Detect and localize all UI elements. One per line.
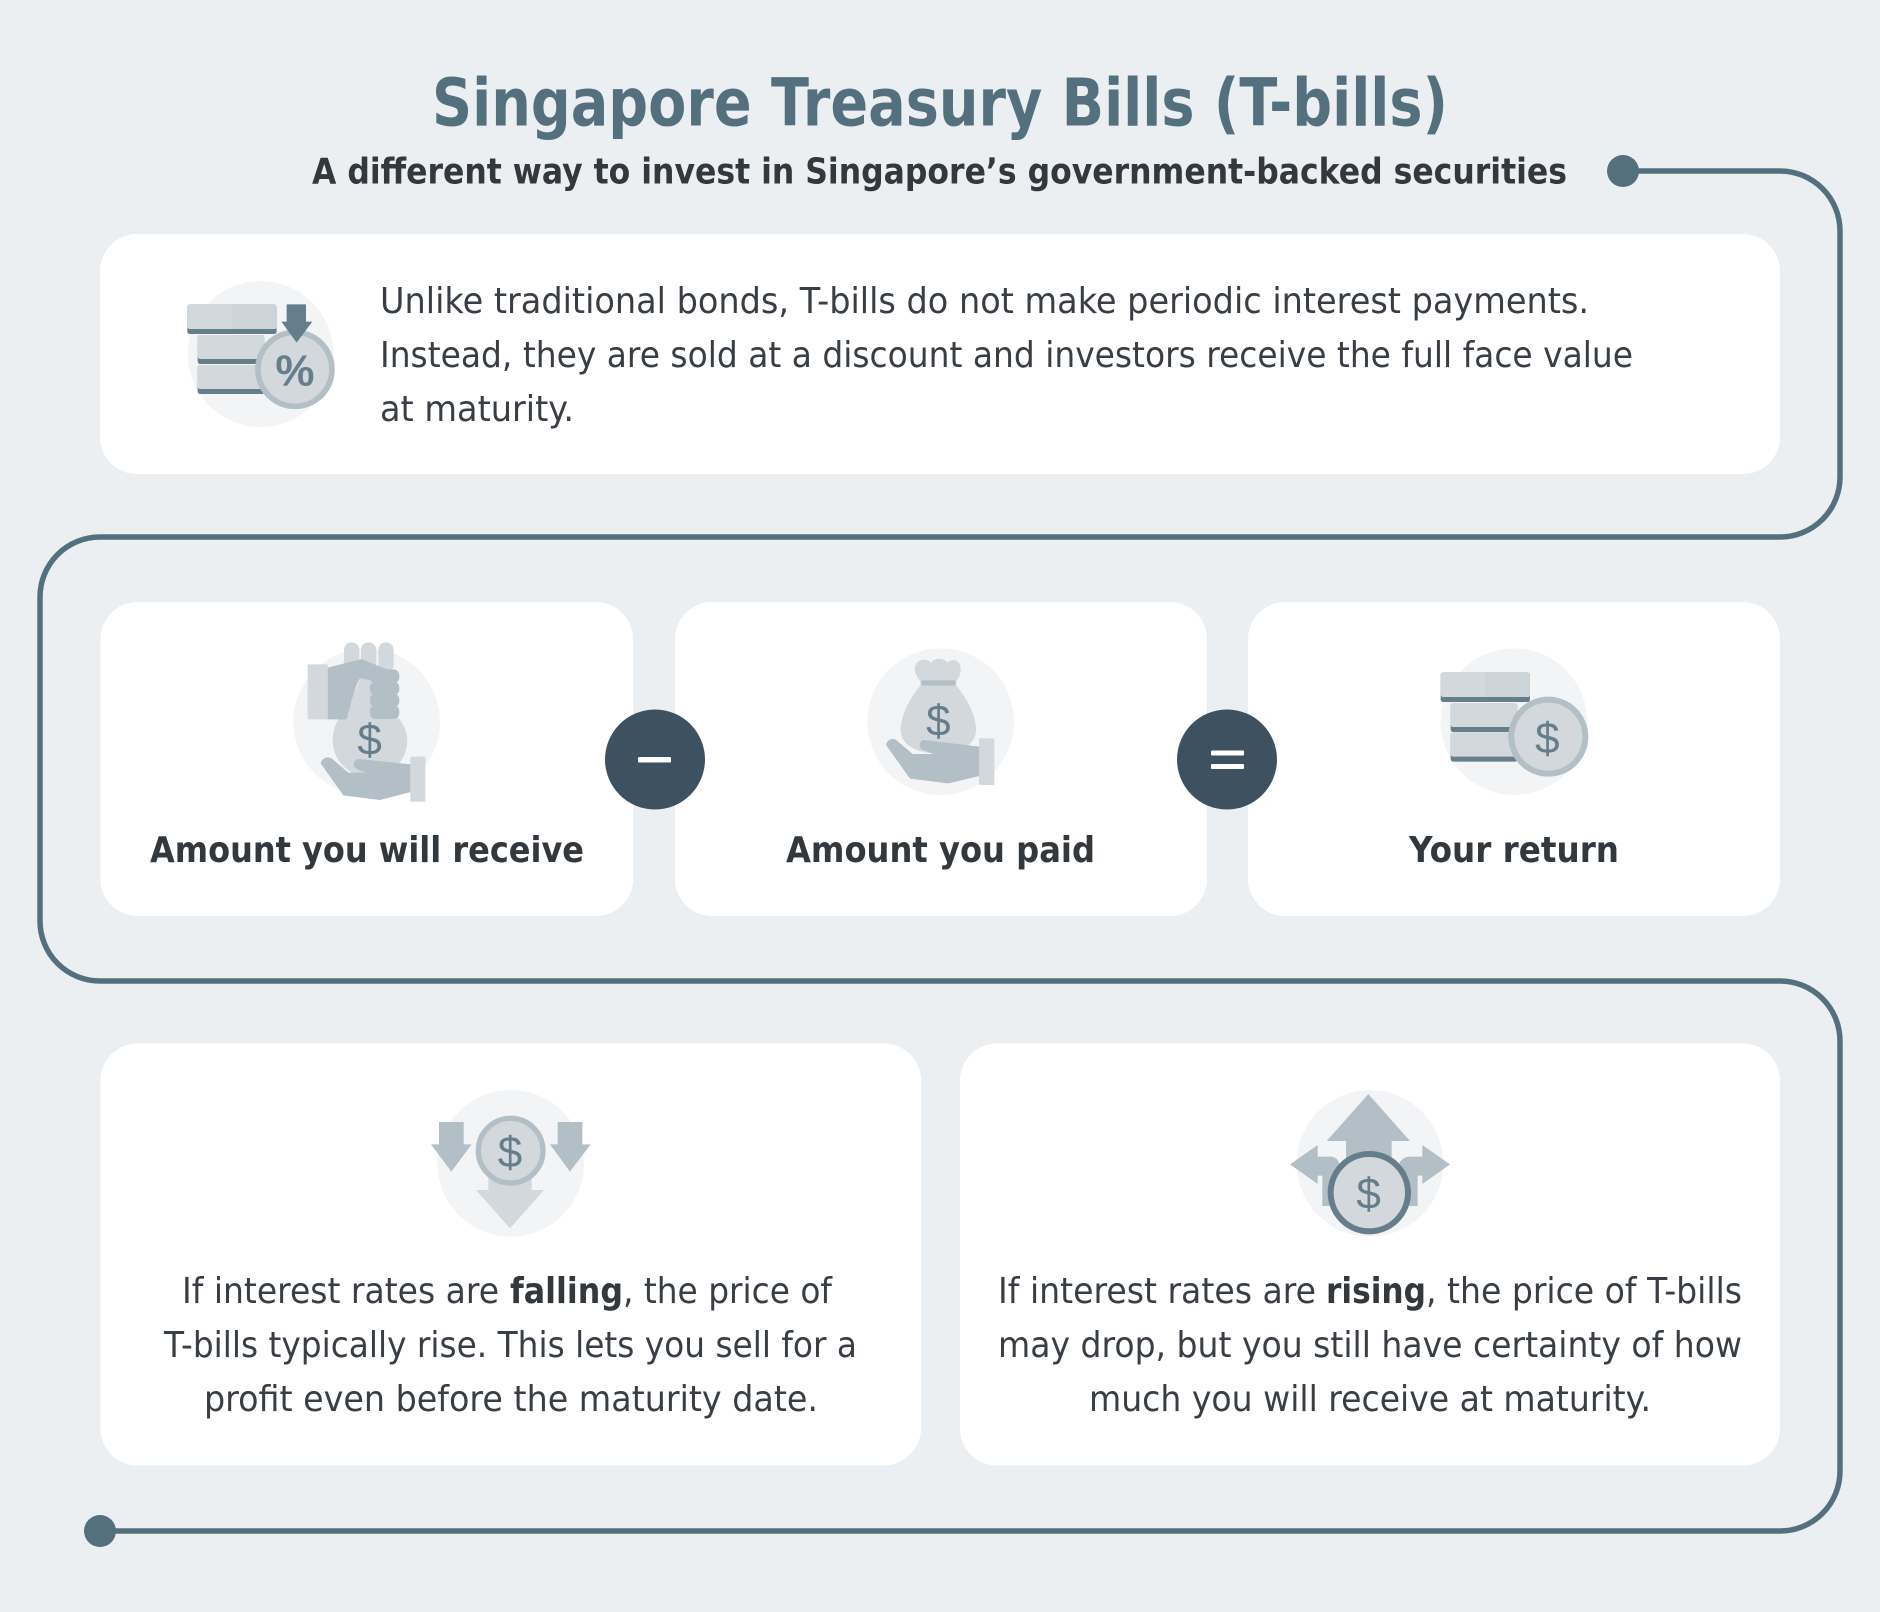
title: Singapore Treasury Bills (T-bills) (432, 64, 1448, 142)
body text: If interest rates are (998, 1271, 1316, 1312)
icon: coin stack with percent and down arrow: % (275, 346, 315, 395)
icon: dollar coin with down arrows: $ (498, 1128, 522, 1177)
subtitle: A different way to invest in Singapore’s government-backed securities (312, 152, 1567, 192)
icon: money bag on hand: $ (926, 696, 951, 745)
body text (163, 1271, 857, 1420)
body text: at maturity. (380, 389, 574, 430)
icon: hand passing money bag to hand (293, 642, 440, 802)
card background (1248, 602, 1780, 916)
operator: equals (1177, 710, 1277, 810)
panel: rising interest rates (960, 1044, 1780, 1466)
panel: amount you will receive (100, 602, 633, 916)
label: Amount you paid (786, 830, 1095, 871)
panel: your return (1248, 602, 1780, 916)
icon: hand passing money bag to hand: $ (357, 716, 382, 765)
panel: discount explanation (100, 234, 1780, 474)
card background (960, 1044, 1780, 1466)
body text: , the price of T-bills (1426, 1271, 1742, 1312)
body text: falling (510, 1271, 623, 1312)
icon: coin stack with dollar coin (1441, 648, 1587, 795)
icon: coin stack with percent and down arrow (187, 281, 334, 427)
body text: may drop, but you still have certainty of how (998, 1325, 1742, 1366)
body text: much you will receive at maturity. (1089, 1379, 1651, 1420)
body text: If interest rates are (182, 1271, 499, 1312)
card background (100, 1044, 921, 1466)
body text: , the price of (623, 1271, 833, 1312)
icon: dollar coin with down arrows (431, 1090, 591, 1237)
body text: Instead, they are sold at a discount and investors receive the full face value (380, 335, 1633, 376)
icon: money bag on hand (867, 648, 1014, 795)
body text: profit even before the maturity date. (204, 1379, 818, 1420)
body text: T-bills typically rise. This lets you sell for a (163, 1325, 857, 1366)
label: Your return (1408, 830, 1619, 871)
operator: minus (605, 710, 705, 810)
label: Amount you will receive (150, 830, 584, 871)
card background (675, 602, 1207, 916)
body text (380, 281, 1633, 430)
body text (998, 1271, 1742, 1420)
panel: amount you paid (675, 602, 1207, 916)
body text: rising (1326, 1271, 1426, 1312)
body text: Unlike traditional bonds, T-bills do not make periodic interest payments. (380, 281, 1589, 322)
card background (100, 234, 1780, 474)
panel: falling interest rates (100, 1044, 921, 1466)
card background (100, 602, 633, 916)
icon: coin stack with dollar coin: $ (1535, 714, 1560, 763)
icon: dollar coin with up and side arrows: $ (1356, 1169, 1381, 1218)
icon: dollar coin with up and side arrows (1290, 1090, 1450, 1237)
